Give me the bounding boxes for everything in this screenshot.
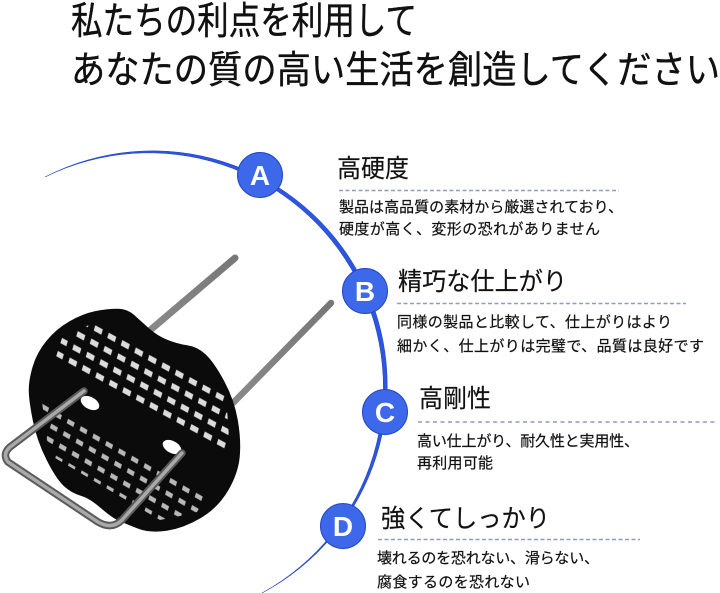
section A text: 硬度が高く、変形の恐れがありません [339, 221, 600, 238]
badge C: C [375, 397, 395, 428]
section D text: 強くてしっかり [381, 505, 550, 533]
pins behind plate [148, 258, 331, 403]
badge D [320, 504, 366, 548]
badge B [342, 268, 388, 314]
badge C [362, 390, 408, 434]
section D text: 腐食するのを恐れない [377, 574, 530, 591]
section B text: 同様の製品と比較して、仕上がりはより [397, 314, 672, 331]
section D text [377, 505, 640, 591]
section C text: 高剛性 [419, 385, 491, 413]
section A text [337, 155, 623, 238]
badge B: B [355, 276, 375, 307]
section B text: 細かく、仕上がりは完璧で、品質は良好です [397, 337, 704, 355]
title: 私たちの利点を利用して [71, 1, 417, 43]
blue arc connector [45, 151, 387, 593]
section C text: 高い仕上がり、耐久性と実用性、 [417, 433, 639, 450]
badge A: A [250, 160, 270, 191]
U-shaped wire [5, 391, 182, 526]
black perforated plate [30, 310, 239, 530]
lower hole grid [42, 402, 206, 520]
section B text: 精巧な仕上がり [398, 268, 567, 296]
section D text: 壊れるのを恐れない、滑らない、 [377, 550, 599, 567]
section B text [397, 268, 704, 355]
product illustration: plate with pins [5, 258, 331, 530]
title [71, 1, 720, 92]
badge D: D [333, 511, 353, 542]
section C text: 再利用可能 [417, 455, 493, 472]
section A text: 高硬度 [337, 155, 409, 183]
badge A [238, 152, 282, 198]
slot holes [78, 393, 184, 457]
upper hole grid [55, 322, 230, 452]
section A text: 製品は高品質の素材から厳選されており、 [339, 198, 623, 216]
section C text [417, 385, 716, 472]
